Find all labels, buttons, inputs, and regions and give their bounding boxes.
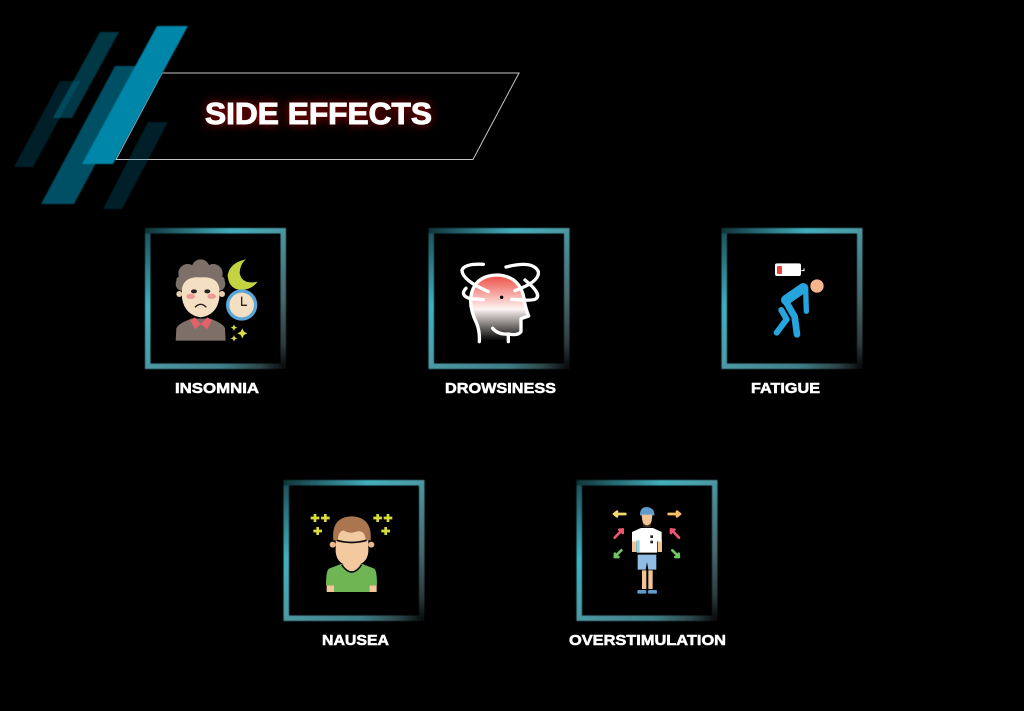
icon: man with arrows: [614, 507, 680, 594]
label: OVERSTIMULATION: [569, 632, 726, 649]
frame: [722, 228, 862, 369]
label: FATIGUE: [751, 380, 820, 397]
header banner: [14, 26, 519, 209]
decorative diagonal bars: [14, 26, 188, 209]
banner outline: [116, 73, 519, 160]
label: INSOMNIA: [175, 380, 259, 397]
title: SIDE EFFECTS: [205, 96, 432, 131]
frame: [145, 228, 286, 369]
label: DROWSINESS: [445, 380, 556, 397]
icon: tired person with low battery: [775, 263, 824, 334]
title: SIDE EFFECTS: [205, 96, 432, 131]
panel: overstimulation: [569, 480, 726, 649]
panel: insomnia: [145, 228, 286, 397]
panel: fatigue: [722, 228, 862, 397]
frame: [428, 228, 570, 369]
panel: nausea: [284, 480, 424, 649]
frame: [576, 480, 718, 621]
label: NAUSEA: [322, 632, 389, 649]
panel: drowsiness: [428, 228, 570, 397]
icon: head with orbits: [462, 264, 538, 342]
icon: dizzy man: [311, 514, 392, 592]
frame: [284, 480, 424, 621]
icon: sleepless man with moon and clock: [176, 259, 258, 342]
